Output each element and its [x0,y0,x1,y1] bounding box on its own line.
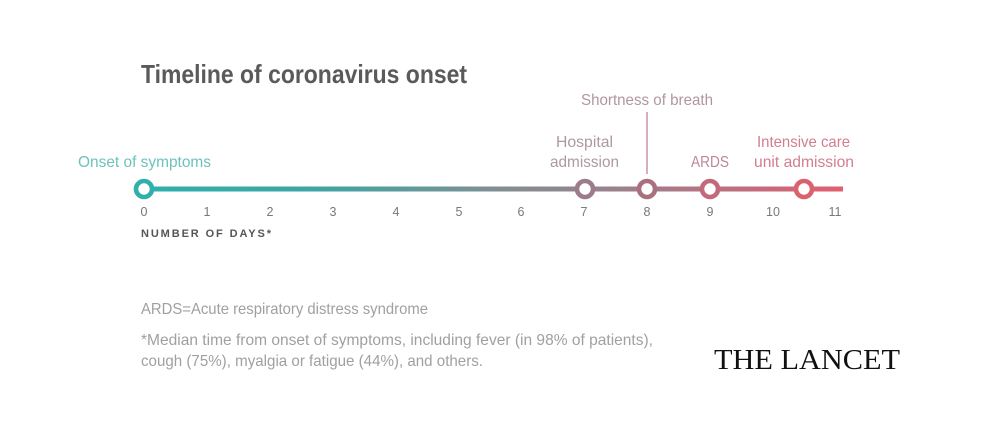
logo: The Lancet: THE LANCET [714,344,900,376]
footnote: median time [141,332,653,370]
label: intensive care unit admission [754,134,854,171]
axis day numbers: 11 [829,205,842,219]
footnote: median time: cough (75%), myalgia or fatigue (44%), and others. [141,353,483,370]
axis day numbers: 1 [204,205,211,219]
label: intensive care unit admission: Intensive care [757,134,850,151]
label: shortness of breath: Shortness of breath [581,92,713,109]
marker: day 9 [702,181,718,197]
axis day numbers: 9 [707,205,714,219]
axis day numbers: 5 [456,205,463,219]
axis day numbers [141,205,842,219]
label: hospital admission: admission [550,154,619,171]
marker: day 8 [639,181,655,197]
connector: shortness of breath to day 8 [646,112,648,174]
label: hospital admission [550,134,619,171]
axis title: NUMBER OF DAYS* [141,228,272,240]
marker: day 10.5 [796,181,812,197]
axis day numbers: 6 [518,205,525,219]
label: hospital admission: Hospital [556,134,613,151]
marker: day 0 [136,181,152,197]
label: ARDS: ARDS [691,154,729,171]
axis day numbers: 3 [330,205,337,219]
timeline bar [144,186,843,192]
label: intensive care unit admission: unit admission [754,154,854,171]
axis day numbers: 4 [393,205,400,219]
axis day numbers: 7 [581,205,588,219]
marker: day 7 [577,181,593,197]
axis day numbers: 10 [766,205,780,219]
axis day numbers: 2 [267,205,274,219]
title: Timeline of coronavirus onset [141,59,467,89]
axis day numbers: 0 [141,205,148,219]
label: onset of symptoms: Onset of symptoms [78,154,211,171]
axis day numbers: 8 [644,205,651,219]
footnote: ARDS definition: ARDS=Acute respiratory distress syndrome [141,301,428,318]
footnote: median time: *Median time from onset of symptoms, including fever (in 98% of patients), [141,332,653,349]
